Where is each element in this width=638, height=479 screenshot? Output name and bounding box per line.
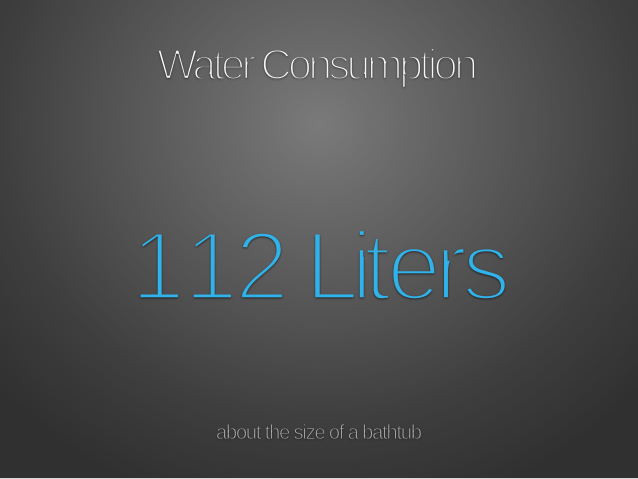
caption: about the size of a bathtub (216, 422, 422, 444)
title: Water Consumption (157, 41, 478, 89)
bottom edge (0, 478, 638, 479)
main figure: 112 Liters: 112 Liters (131, 212, 510, 320)
